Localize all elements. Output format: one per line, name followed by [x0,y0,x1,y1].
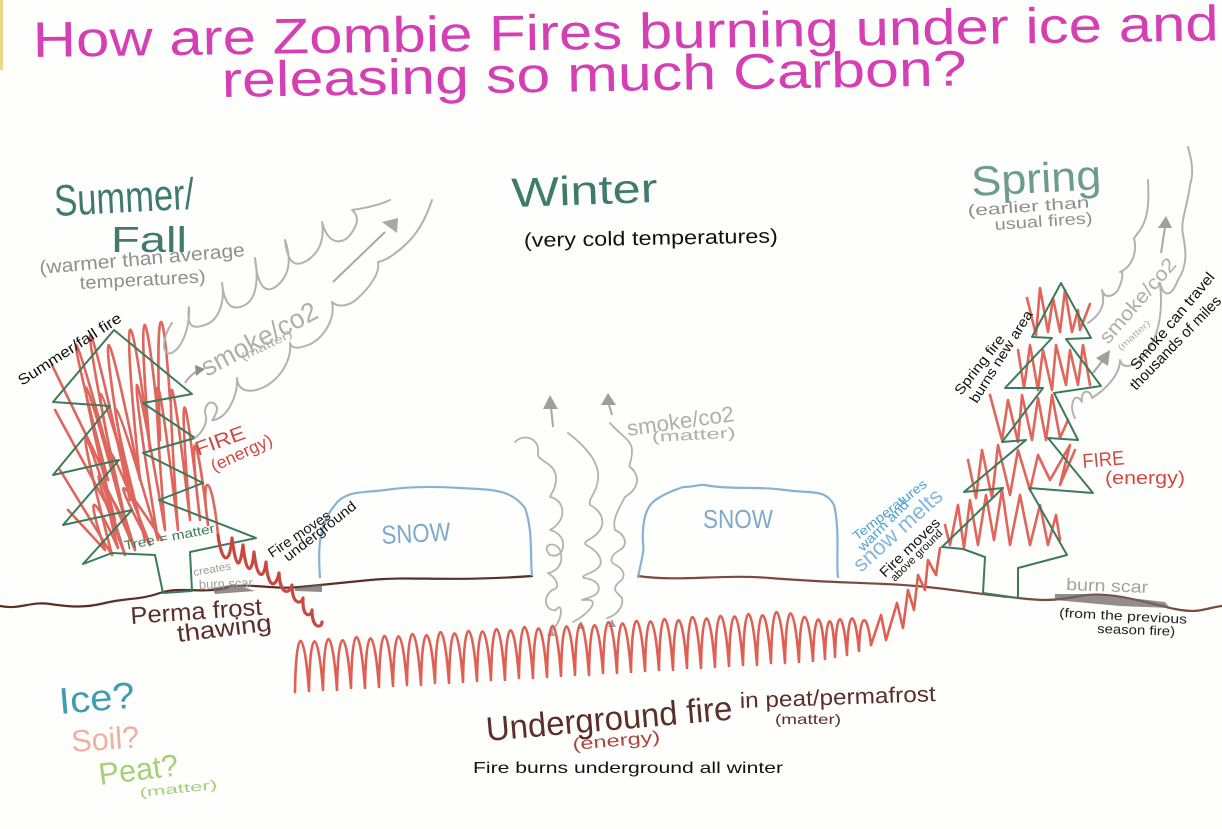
text: earlier than usual fires: (earlier than [967,195,1090,220]
legend: matter questions: Soil? [70,719,140,759]
small arrows from underground fire [547,619,616,636]
smoke: spring [1072,147,1192,418]
label: fire energy right: (energy) [1105,468,1185,488]
label: from the previous season fire: season fire) [1097,621,1175,639]
smoke: summer/fall [164,200,432,438]
panel: winter scene [295,393,940,692]
label: fire moves above ground: above ground [889,528,945,584]
label: temperatures warm and snow melts: Temperatures [850,476,930,543]
label: fire moves underground: Fire moves [265,507,333,560]
label: fire moves underground: underground [280,498,359,564]
label: underground fire: Underground fire [484,690,734,749]
label: smoke/co2 center: (matter) [651,425,736,446]
label: smoke/co2 center: smoke/co2 [625,401,736,441]
snow right [638,485,838,578]
label: permafrost thawing [130,594,273,648]
label: permafrost thawing: thawing [175,610,273,648]
fire in summer tree [52,322,218,555]
label: spring fire burns new area: Spring fire [951,331,1008,398]
arrow: smoke rising summer [333,218,398,282]
legend: matter questions: Ice? [57,675,136,722]
heading: spring: Spring [970,151,1102,205]
label: fire energy left [192,422,276,476]
text: warmer than average: (warmer than average [39,240,246,279]
label: burn scar: burn scar [1066,575,1149,597]
heading: summer/fall: Fall [111,219,187,260]
underground fire [295,612,871,692]
label: temperatures warm and snow melts: warm and [854,497,912,555]
text: earlier than usual fires [967,195,1093,234]
label: from the previous season fire [1059,605,1188,639]
summer tree outline [53,330,256,593]
arrow: spring small smoke [1093,350,1110,373]
label: smoke can travel: Smoke can travel [1127,269,1218,374]
label: underground fire: (matter) [775,711,841,727]
label: creates burn scar: creates [192,560,232,579]
label: creates burn scar: burn scar [199,575,254,592]
arrow: left smoke up [543,395,558,427]
label: fire moves above ground: Fire moves [876,514,943,580]
label: fire energy right: FIRE [1082,447,1125,473]
legend: matter questions: (matter) [139,777,218,800]
panel: summer/fall scene [52,200,532,626]
label: creates burn scar [192,560,254,592]
heading: summer/fall [53,170,196,260]
label: fire energy right [1082,447,1185,488]
arrow: spring smoke up [1158,216,1172,253]
panel: spring scene [942,147,1192,598]
heading: winter: Winter [511,165,658,216]
label: snow right: SNOW [703,504,773,534]
fire rising on right [871,548,940,645]
ground line [0,576,1222,611]
label: smoke/co2 right: (matter) [1116,318,1152,352]
label: temperatures warm and snow melts: snow melts [848,483,948,577]
text: fire burns underground all winter: Fire burns underground all winter [473,760,784,777]
label: tree matter: Tree = matter [123,521,217,553]
text: warmer than average: temperatures) [79,266,206,293]
title: How are Zombie Fires burning under ice and [32,0,1219,68]
label: energy: (energy) [572,727,661,754]
text: very cold temperatures: (very cold temperatures) [524,226,778,252]
text: earlier than usual fires: usual fires) [994,210,1093,234]
spring tree outline [942,283,1101,598]
label: smoke/co2 matter left: (matter) [239,328,295,364]
burn scar marks [212,584,1170,608]
label: fire energy left: (energy) [208,431,276,476]
smoke columns [515,423,637,632]
legend: matter questions: Peat? [97,747,180,792]
label: smoke/co2 matter left: smoke/co2 [196,296,323,382]
label: spring fire burns new area [951,307,1036,406]
label: spring fire burns new area: burns new area [966,307,1036,406]
fire moving underground [218,535,322,626]
label: fire energy left: FIRE [192,422,249,461]
label: underground fire: in peat/permafrost [739,681,936,713]
arrow: small smoke [185,365,205,383]
legend: matter questions [57,675,218,800]
heading: summer/fall: Summer/ [53,170,196,226]
snow left [319,487,532,578]
text: warmer than average [39,240,246,293]
label: summer/fall fire: Summer/fall fire [15,310,125,389]
title: releasing so much Carbon? [221,40,967,108]
fire in spring tree [945,288,1090,548]
arrow: right smoke up [601,393,616,415]
title [32,0,1219,108]
label: snow left: SNOW [381,516,452,550]
label: permafrost thawing: Perma frost [130,594,263,630]
label: underground fire [484,681,936,749]
label: from the previous season fire: (from the previous [1059,605,1188,627]
label: smoke/co2 right: smoke/co2 [1095,254,1181,348]
